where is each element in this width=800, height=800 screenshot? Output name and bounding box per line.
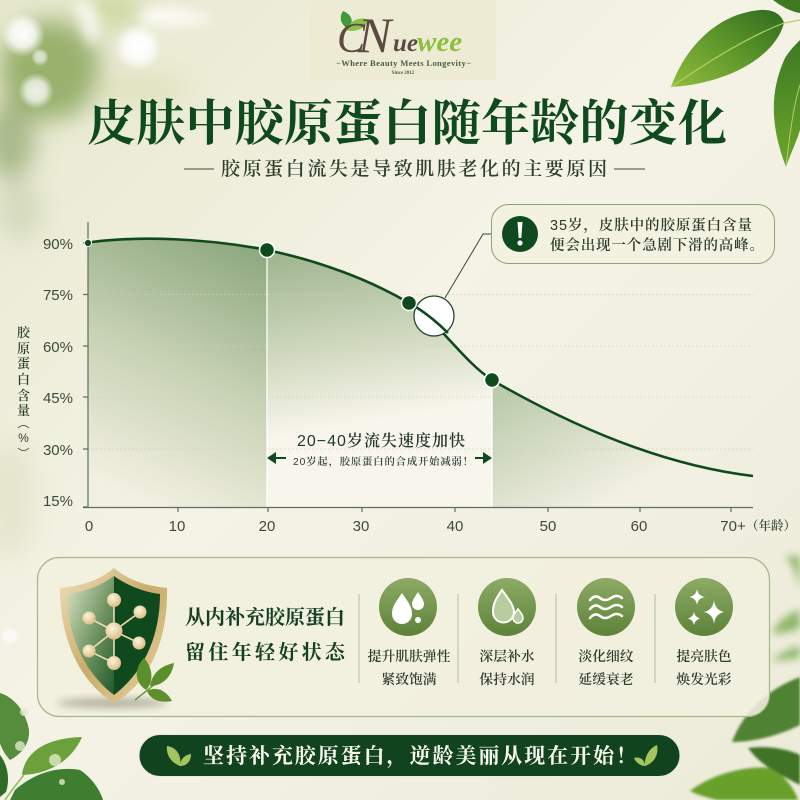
y axis title: % bbox=[18, 431, 29, 445]
range label: 20岁起，胶原蛋白的合成开始减弱！ bbox=[293, 455, 473, 468]
x axis labels: 40 bbox=[447, 518, 463, 535]
data points bbox=[84, 240, 500, 388]
y axis title: 原 bbox=[17, 341, 31, 356]
icon: exclamation bbox=[502, 216, 538, 252]
y axis title bbox=[17, 325, 31, 450]
icon: left sprig bbox=[167, 746, 191, 766]
y axis bbox=[83, 222, 88, 507]
logo wordmark: ue bbox=[393, 30, 418, 57]
icon: drops bbox=[392, 592, 424, 624]
panel heading: 从内补充胶原蛋白 bbox=[185, 606, 345, 629]
decorative leaves: bottom right bbox=[690, 556, 800, 800]
icon: right sprig bbox=[634, 745, 657, 766]
y axis labels: 90% bbox=[43, 236, 73, 253]
range label bbox=[267, 431, 492, 468]
callout text: 35岁，皮肤中的胶原蛋白含量 bbox=[550, 218, 752, 234]
label: 淡化细纹 bbox=[578, 649, 634, 664]
y axis labels: 60% bbox=[43, 339, 73, 356]
range label: 20−40岁流失速度加快 bbox=[297, 431, 465, 450]
benefit: elasticity bbox=[368, 578, 451, 687]
logo wordmark: wee bbox=[417, 26, 462, 58]
label: 深层补水 bbox=[479, 648, 535, 664]
panel: benefits bbox=[38, 558, 770, 716]
collagen curve bbox=[92, 239, 753, 476]
subtitle: 胶原蛋白流失是导致肌肤老化的主要原因 bbox=[221, 158, 607, 180]
y axis labels: 75% bbox=[43, 287, 73, 304]
x axis labels: 20 bbox=[259, 518, 275, 535]
area under curve: 0–20 bbox=[88, 239, 267, 507]
x axis labels: 60 bbox=[631, 518, 647, 535]
icon: waves bbox=[590, 596, 622, 618]
line chart bbox=[17, 222, 796, 535]
x axis labels: 50 bbox=[540, 518, 556, 535]
benefit: hydration bbox=[478, 578, 536, 687]
logo year: Since 2012 bbox=[392, 71, 415, 76]
logo tagline: −Where Beauty Meets Longevity− bbox=[336, 58, 471, 68]
label: 提亮肤色 bbox=[676, 648, 732, 664]
logo bbox=[310, 0, 496, 80]
title: 皮肤中胶原蛋白随年龄的变化 bbox=[87, 96, 727, 151]
y axis title: 蛋 bbox=[17, 356, 30, 371]
x axis labels bbox=[85, 518, 796, 535]
x axis bbox=[83, 507, 753, 512]
banner text: 坚持补充胶原蛋白，逆龄美丽从现在开始！ bbox=[203, 744, 637, 769]
label: 提升肌肤弹性 bbox=[368, 648, 451, 664]
x axis labels: 70+ bbox=[720, 518, 746, 535]
y axis labels: 30% bbox=[43, 442, 73, 459]
x axis labels: 10 bbox=[169, 518, 185, 535]
highlighted band: 20–44 bbox=[267, 250, 492, 507]
x axis labels: 30 bbox=[353, 518, 369, 535]
x axis labels: （年龄） bbox=[746, 518, 796, 533]
sprig bbox=[135, 658, 174, 702]
icon: water drop bbox=[493, 590, 523, 623]
benefit: brightening bbox=[675, 578, 733, 687]
callout leader bbox=[445, 234, 492, 298]
decorative leaves: bottom left bbox=[0, 693, 103, 800]
molecule bbox=[82, 593, 146, 670]
y axis title: 白 bbox=[17, 372, 30, 387]
label: 延缓衰老 bbox=[578, 671, 634, 687]
y axis labels: 45% bbox=[43, 390, 73, 407]
icon: logo leaves bbox=[341, 11, 370, 31]
y axis labels: 15% bbox=[43, 493, 73, 510]
y axis labels bbox=[43, 236, 73, 510]
range arrows bbox=[267, 452, 492, 464]
area under curve: 44–70+ bbox=[492, 380, 753, 507]
y axis title: 量 bbox=[17, 403, 30, 418]
logo wordmark: N bbox=[357, 7, 394, 63]
icon: sparkles bbox=[688, 589, 724, 625]
callout text: 便会出现一个急剧下滑的高峰。 bbox=[550, 236, 764, 254]
x axis labels: 0 bbox=[85, 518, 93, 535]
y axis title: 含 bbox=[17, 388, 30, 403]
icon: shield bbox=[57, 568, 174, 708]
callout bbox=[492, 204, 774, 264]
label: 紧致饱满 bbox=[381, 671, 437, 687]
logo wordmark: C bbox=[337, 16, 366, 62]
y axis title: 胶 bbox=[17, 325, 31, 340]
bottom banner bbox=[139, 734, 680, 776]
benefit: fine lines bbox=[577, 578, 635, 687]
decorative leaves: top right bbox=[671, 0, 800, 167]
label: 保持水润 bbox=[479, 671, 535, 687]
label: 焕发光彩 bbox=[675, 671, 732, 687]
panel heading: 留住年轻好状态 bbox=[185, 640, 347, 664]
magnifier circle bbox=[414, 296, 454, 336]
